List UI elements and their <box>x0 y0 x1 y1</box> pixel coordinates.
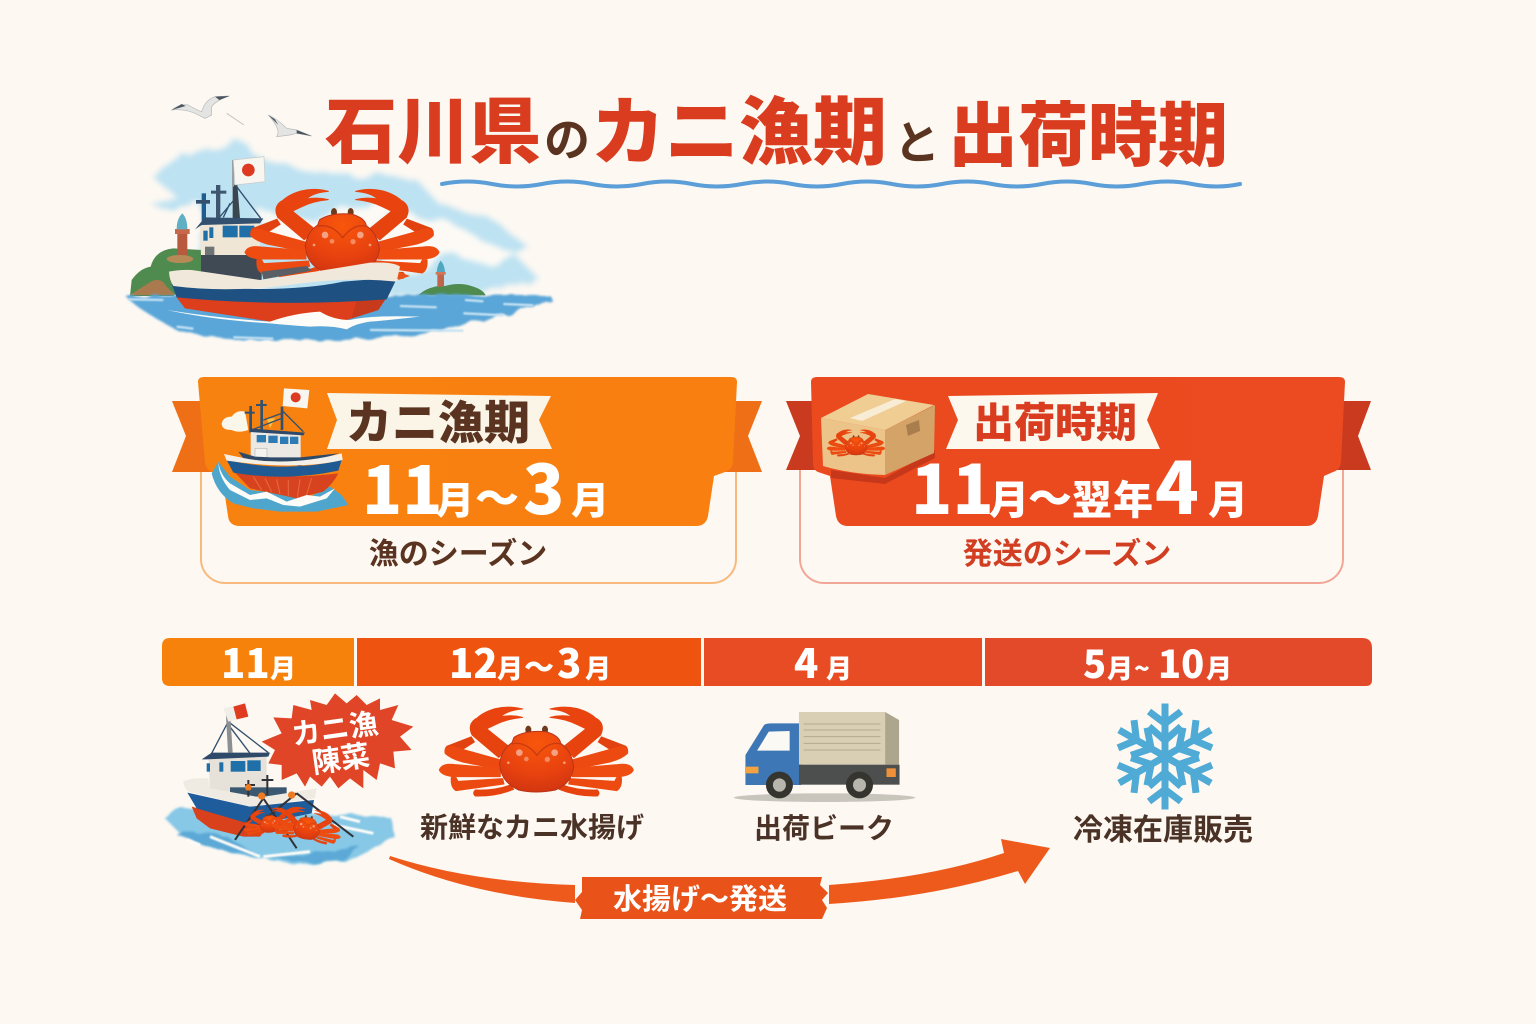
date range: 月 <box>989 468 1029 526</box>
banner: 水揚げ〜発送: 水揚げ〜発送 <box>613 876 787 918</box>
callout burst <box>262 693 413 788</box>
date range: 月 <box>571 470 609 525</box>
outline card <box>800 440 1343 583</box>
boat hull <box>167 262 420 329</box>
label 5月〜10月: 月 <box>1206 649 1232 686</box>
label 5月〜10月: 5 <box>1083 634 1106 689</box>
seagull 1 <box>172 96 244 125</box>
panel: fishing season <box>172 377 762 583</box>
date range: 11 <box>911 435 994 534</box>
label 12月〜3月: 月 <box>497 649 523 686</box>
label 11月: 月 <box>270 649 296 686</box>
title: 出荷時期 <box>948 80 1228 181</box>
callout burst: 陳菜 <box>309 732 372 782</box>
caption: 発送のシーズン <box>963 529 1171 573</box>
arrow: landing to shipping flow <box>389 839 1050 904</box>
date range: 月 <box>436 470 474 525</box>
label 12月〜3月: 月 <box>585 649 611 686</box>
fishing boat superstructure <box>195 157 265 282</box>
date range: 月 <box>1208 468 1248 526</box>
heading: 出荷時期 <box>973 389 1137 449</box>
icon: delivery truck <box>734 712 915 802</box>
ribbon tails <box>786 401 1371 470</box>
ribbon tails <box>172 401 762 472</box>
stage: frozen stock sales <box>1073 704 1253 849</box>
title <box>325 73 1228 181</box>
net crabs <box>235 775 353 848</box>
title: 石川県 <box>325 73 541 178</box>
label 11月: 11 <box>221 632 270 690</box>
banner: 水揚げ〜発送 <box>575 876 828 919</box>
sky watercolour <box>150 140 537 295</box>
icon: snowflake <box>1111 704 1219 810</box>
caption: 新鮮なカニ水揚げ <box>420 806 644 846</box>
stage: shipping peak <box>734 712 915 847</box>
icon: snow crab <box>439 707 633 796</box>
icon: small boat <box>212 388 348 512</box>
heading tag <box>327 393 552 449</box>
stage: November boat with crab nets <box>163 703 395 865</box>
title: カニ漁期 <box>591 73 887 180</box>
icon: crab parcel box <box>821 394 935 484</box>
ribbon body <box>811 377 1345 526</box>
caption: 漁のシーズン <box>369 529 547 573</box>
title: の <box>544 104 590 170</box>
label 12月〜3月: 3 <box>557 632 581 690</box>
caption: 出荷ビーク <box>754 807 894 847</box>
segment: November <box>162 638 354 686</box>
panel: shipping season <box>786 377 1371 583</box>
right island and lighthouse <box>418 261 486 295</box>
date range: 〜 <box>1028 463 1072 527</box>
label 4月: 4 <box>794 632 818 690</box>
heading: カニ漁期 <box>346 387 530 453</box>
date range: 11 <box>362 438 442 534</box>
label 5月〜10月: 10 <box>1158 634 1204 689</box>
boat <box>183 703 317 837</box>
label 12月〜3月: 〜 <box>524 643 554 687</box>
label 5月〜10月: ~ <box>1134 649 1150 686</box>
outline card <box>201 440 736 583</box>
label 4月: 月 <box>826 649 852 686</box>
date range: 〜 <box>475 463 519 527</box>
label 12月〜3月: 12 <box>449 632 498 690</box>
date range: 4 <box>1155 430 1199 535</box>
date range: 年 <box>1113 468 1153 526</box>
title wavy underline <box>442 182 1240 186</box>
callout burst: カニ漁 <box>289 700 381 754</box>
title: と <box>894 107 940 173</box>
segment: May to October <box>985 638 1372 686</box>
date range: 翌 <box>1072 468 1112 526</box>
sea <box>127 295 552 340</box>
timeline bar <box>162 632 1372 690</box>
label 5月〜10月: 月 <box>1107 649 1133 686</box>
sea patch <box>163 809 395 865</box>
heading tag <box>946 393 1160 449</box>
left island and lighthouse <box>130 213 202 296</box>
stage: fresh crab landing <box>420 707 644 846</box>
segment: April <box>704 638 982 686</box>
ribbon body <box>198 377 737 526</box>
seagull 2 <box>268 115 312 137</box>
date range: 3 <box>523 435 564 534</box>
caption: 冷凍在庫販売 <box>1073 805 1253 849</box>
snow crab <box>245 189 439 278</box>
hero illustration: boat, crab and lighthouses <box>127 140 552 340</box>
segment: December to March <box>357 638 701 686</box>
